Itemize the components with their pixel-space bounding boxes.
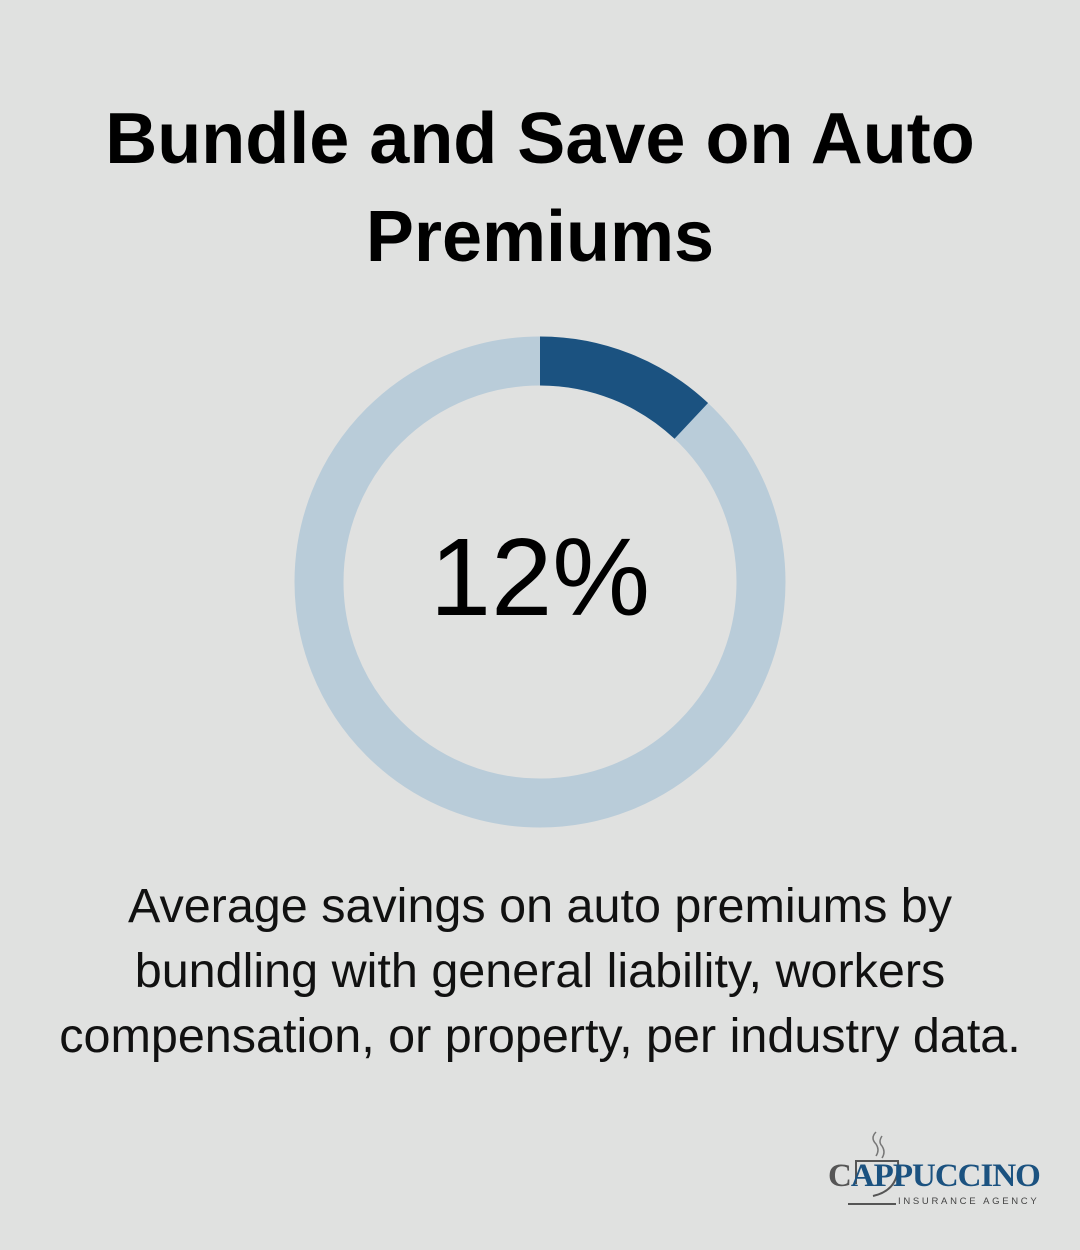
title: Bundle and Save on Auto: [105, 99, 975, 179]
logo: [828, 1132, 1040, 1207]
big number: 12%: [430, 516, 650, 639]
logo: CAPPUCCINO: [828, 1158, 1040, 1194]
title: Premiums: [366, 197, 714, 277]
description: bundling with general liability, workers: [135, 944, 945, 998]
title: [105, 99, 975, 277]
description: Average savings on auto premiums by: [128, 879, 952, 933]
description: compensation, or property, per industry data.: [59, 1009, 1021, 1063]
logo: INSURANCE AGENCY: [898, 1196, 1039, 1207]
description: [59, 879, 1021, 1063]
